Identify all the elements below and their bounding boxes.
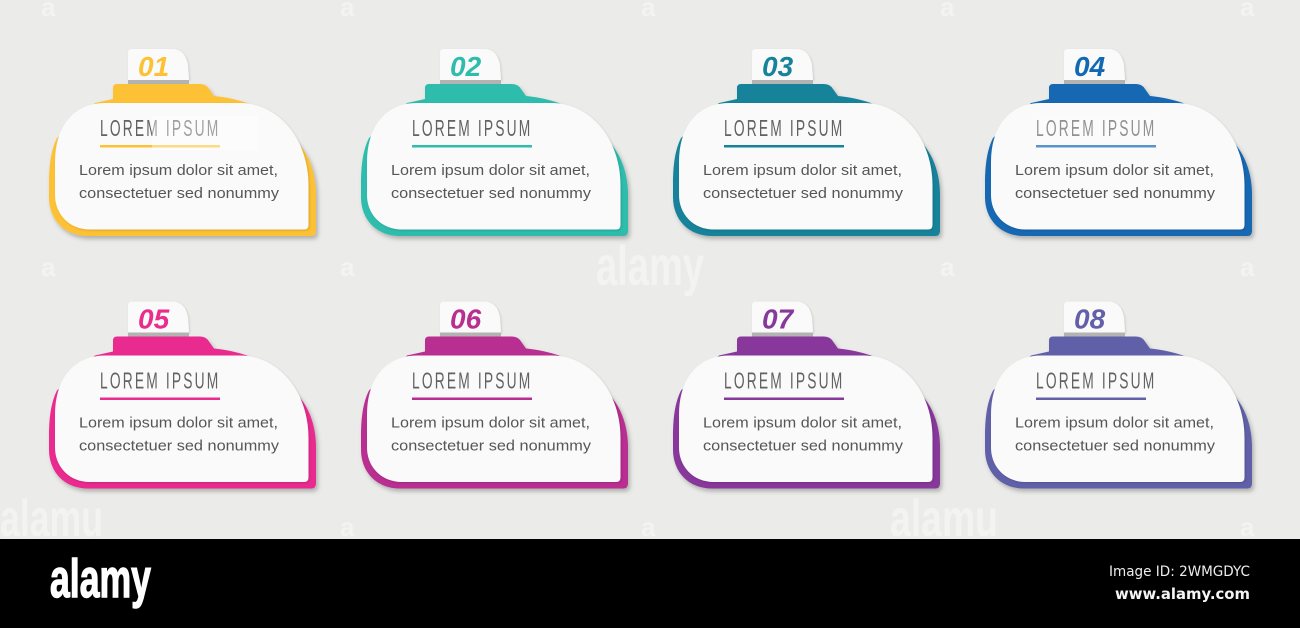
panel: card 04 <box>985 49 1252 236</box>
panel: card 03 <box>673 49 940 236</box>
panel: card 01: consectetuer sed nonummy <box>79 185 280 202</box>
panel: card 07: 07 <box>762 304 795 334</box>
watermarks: alamu <box>890 490 998 548</box>
panel: card 01: 01 <box>138 51 169 82</box>
panel: card 03: consectetuer sed nonummy <box>703 185 904 202</box>
panel: card 08: 08 <box>1074 304 1106 334</box>
watermarks: a <box>41 252 56 282</box>
panel: card 05: 05 <box>138 304 170 334</box>
panel: card 02: consectetuer sed nonummy <box>391 185 592 202</box>
watermarks: alamy <box>596 234 704 297</box>
panel: card 02: 02 <box>450 51 482 82</box>
panel: card 02: LOREM IPSUM <box>412 117 530 142</box>
panel: card 04: consectetuer sed nonummy <box>1015 185 1216 202</box>
panel: card 04: LOREM IPSUM <box>1036 117 1154 142</box>
watermarks: a <box>641 512 656 542</box>
watermarks: a <box>1240 252 1255 282</box>
panel: card 07: Lorem ipsum dolor sit amet, <box>703 414 902 432</box>
footer bar: Image ID: 2WMGDYC <box>1109 564 1250 580</box>
panel: card 04: 04 <box>1074 51 1106 82</box>
footer bar: www.alamy.com <box>1115 585 1250 603</box>
panel: card 01: LOREM IPSUM <box>100 117 218 142</box>
panel: card 02 <box>361 49 628 236</box>
panel: card 08: Lorem ipsum dolor sit amet, <box>1015 414 1214 432</box>
panel: card 07: LOREM IPSUM <box>724 369 842 395</box>
watermarks: a <box>940 252 955 282</box>
panel: card 03: 03 <box>762 51 794 82</box>
footer bar <box>0 539 1300 628</box>
panel: card 04: Lorem ipsum dolor sit amet, <box>1015 162 1214 179</box>
panel: card 03: Lorem ipsum dolor sit amet, <box>703 162 902 179</box>
footer bar: alamy <box>50 549 151 609</box>
panel: card 08: LOREM IPSUM <box>1036 369 1154 395</box>
panel: card 06: consectetuer sed nonummy <box>391 438 592 454</box>
panel: card 06: 06 <box>450 304 482 334</box>
panel: card 06: LOREM IPSUM <box>412 369 530 395</box>
panel: card 03: LOREM IPSUM <box>724 117 842 142</box>
panel: card 07 <box>673 302 940 488</box>
panel: card 07: consectetuer sed nonummy <box>703 438 904 454</box>
panel: card 01: Lorem ipsum dolor sit amet, <box>79 162 278 179</box>
watermarks: alamu <box>0 490 103 548</box>
panel: card 08: consectetuer sed nonummy <box>1015 438 1216 454</box>
panel: card 05: LOREM IPSUM <box>100 369 218 395</box>
panel: card 01 <box>49 49 316 236</box>
panel: card 08 <box>985 302 1252 488</box>
panel: card 05: consectetuer sed nonummy <box>79 438 280 454</box>
watermarks: a <box>340 252 355 282</box>
panel: card 06 <box>361 302 628 488</box>
panel: card 05 <box>49 302 316 488</box>
watermarks: a <box>340 512 355 542</box>
panel: card 06: Lorem ipsum dolor sit amet, <box>391 414 590 432</box>
watermarks: a <box>1240 512 1255 542</box>
panel: card 05: Lorem ipsum dolor sit amet, <box>79 414 278 432</box>
panel: card 02: Lorem ipsum dolor sit amet, <box>391 162 590 179</box>
